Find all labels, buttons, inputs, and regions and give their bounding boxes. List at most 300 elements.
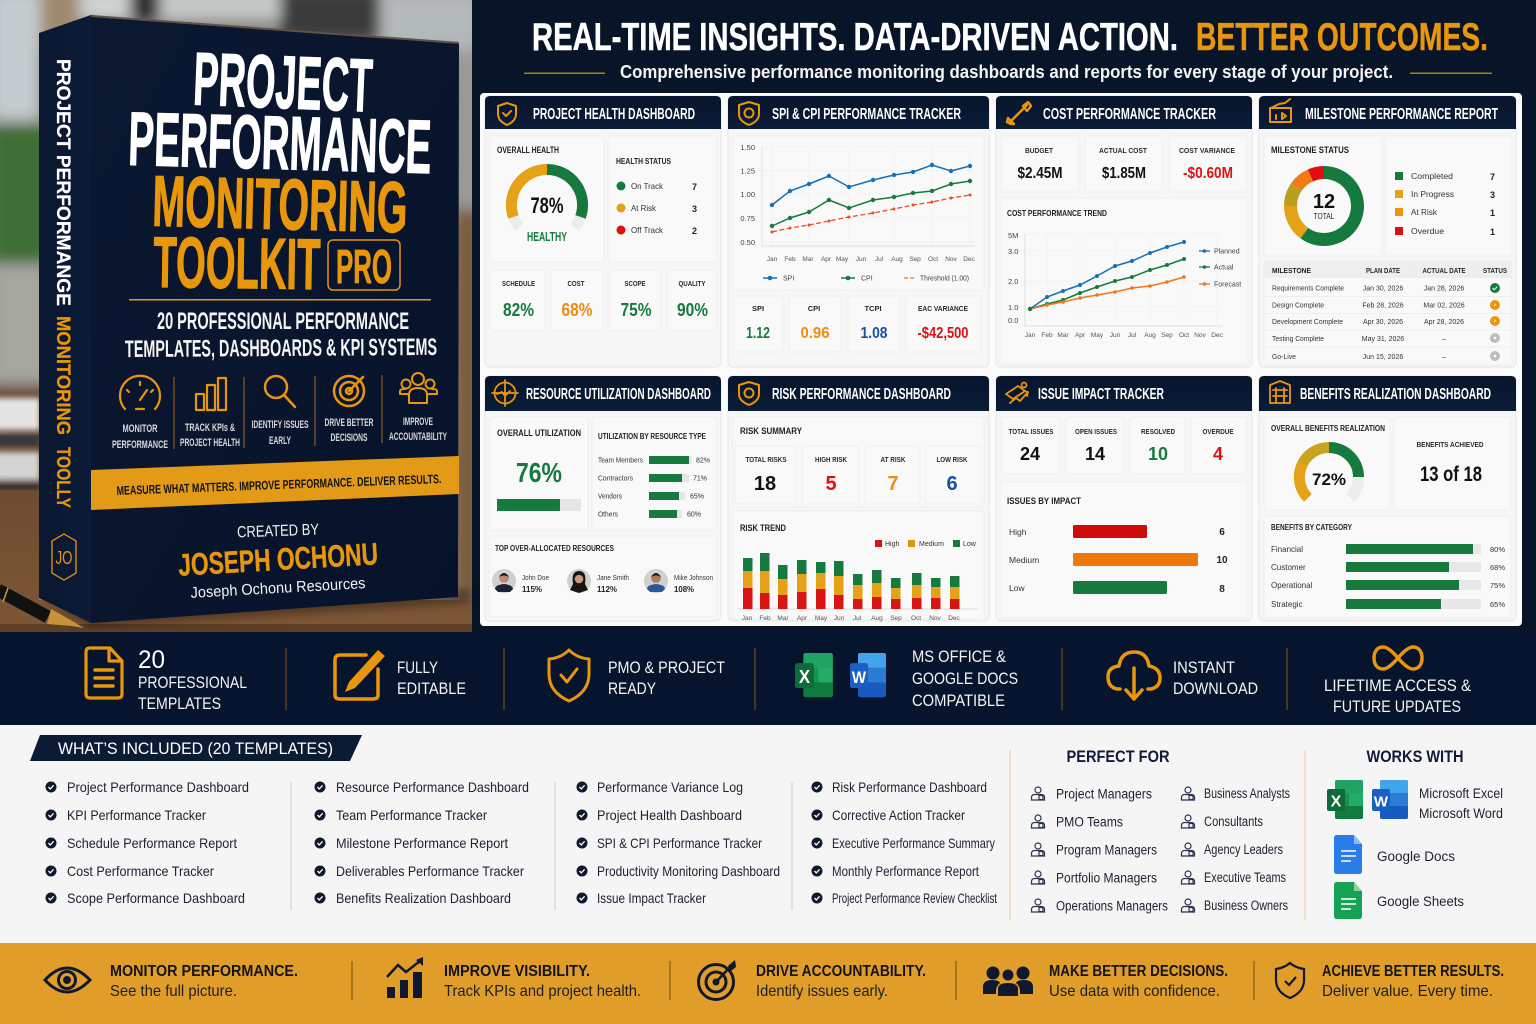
template list: column 1: Scope Performance Dashboard bbox=[67, 890, 245, 906]
cover benefit labels bbox=[112, 375, 447, 451]
cost line chart: Dec bbox=[1211, 332, 1224, 339]
impact bars: 6 bbox=[1219, 527, 1225, 538]
icon: Google Sheets bbox=[1334, 882, 1362, 919]
panel: project health dashboard: 2 bbox=[692, 226, 697, 236]
feature: instant download: INSTANT bbox=[1173, 658, 1235, 677]
cover benefit labels: EARLY bbox=[269, 435, 291, 447]
kpi cards: 68% bbox=[562, 300, 592, 320]
title: headline: REAL-TIME INSIGHTS. DATA-DRIVEN ACTION. bbox=[532, 16, 1178, 59]
line chart: Nov bbox=[945, 256, 958, 263]
panel: works with: WORKS WITH bbox=[1366, 747, 1464, 766]
donut chart: 12 total bbox=[1290, 172, 1357, 240]
kpi cards: EAC VARIANCE bbox=[918, 304, 968, 313]
impact bars: Low bbox=[1009, 583, 1025, 593]
milestone table: MILESTONE bbox=[1272, 266, 1311, 275]
cover benefit labels: TRACK KPIs & bbox=[185, 422, 235, 434]
issue kpi cards: 14 bbox=[1085, 444, 1105, 464]
line chart: Apr bbox=[821, 256, 832, 263]
icon: Excel and Word bbox=[1327, 780, 1408, 819]
milestone table: Requirements Complete bbox=[1272, 286, 1344, 292]
feature: 20 templates: PROFESSIONAL bbox=[138, 673, 247, 692]
line chart: Jan bbox=[767, 256, 778, 263]
kpi cards: -$0.60M bbox=[1183, 165, 1233, 182]
feature: PMO ready: PMO & PROJECT bbox=[608, 658, 725, 677]
icon: magnifier bbox=[265, 376, 295, 407]
book spine: MONITORING bbox=[52, 316, 73, 435]
icon: bar chart bbox=[196, 378, 226, 410]
gauge 72% bbox=[1299, 447, 1359, 498]
utilization bars: 65% bbox=[690, 494, 704, 500]
cover title: PRO bbox=[336, 241, 392, 294]
panel: benefits realization dashboard bbox=[1259, 376, 1516, 621]
milestone table: Jan 28, 2026 bbox=[1424, 286, 1464, 292]
heading bbox=[996, 96, 1252, 129]
heading: RISK PERFORMANCE DASHBOARD bbox=[772, 386, 951, 403]
cost line chart: Oct bbox=[1179, 332, 1189, 339]
cover title: MONITORING bbox=[151, 162, 408, 248]
kpi cards: SCOPE bbox=[624, 279, 646, 288]
issue kpi cards: 4 bbox=[1213, 444, 1223, 464]
feature: MS Office and Google Docs: COMPATIBLE bbox=[912, 691, 1005, 710]
kpi cards: BUDGET bbox=[1025, 146, 1053, 155]
panel: perfect for: Consultants bbox=[1204, 814, 1263, 829]
kpi cards bbox=[490, 270, 717, 331]
stacked bar chart: Aug bbox=[871, 615, 883, 622]
milestone table bbox=[1264, 261, 1512, 365]
panel: works with bbox=[1327, 747, 1503, 919]
kpi cards: CPI bbox=[808, 304, 820, 313]
panel: perfect for: Business Owners bbox=[1204, 898, 1288, 913]
kpi cards: 1.12 bbox=[746, 325, 770, 342]
outcome: achieve better results: Deliver value. Every time. bbox=[1322, 983, 1493, 1000]
panel: perfect for: Agency Leaders bbox=[1204, 842, 1283, 857]
kpi cards: 0.96 bbox=[800, 325, 830, 342]
category bars: 68% bbox=[1490, 563, 1505, 572]
heading bbox=[485, 376, 721, 411]
outcome: monitor performance bbox=[45, 963, 298, 1000]
cost line chart: Feb bbox=[1041, 332, 1053, 339]
utilization bars: Others bbox=[598, 512, 618, 518]
cost line chart: 1.0 bbox=[1008, 303, 1018, 312]
icon: speedometer bbox=[120, 376, 160, 409]
cost line chart: Aug bbox=[1144, 332, 1156, 339]
cover benefit labels: MONITOR bbox=[122, 423, 158, 435]
icon: team bbox=[400, 373, 437, 403]
kpi cards: -$42,500 bbox=[918, 325, 969, 342]
panel: milestone performance report: 1 bbox=[1490, 227, 1495, 237]
panel: perfect for: PERFECT FOR bbox=[1066, 747, 1170, 766]
template list: column 2: Benefits Realization Dashboard bbox=[336, 890, 511, 906]
book spine: TOOLLY bbox=[52, 447, 73, 508]
icon: target bbox=[334, 376, 364, 406]
feature: 20 templates: 20 bbox=[138, 646, 165, 674]
line chart: May bbox=[836, 256, 849, 263]
cost line chart: Forecast bbox=[1214, 282, 1241, 288]
line chart: Threshold (1.00) bbox=[920, 276, 969, 282]
panel: works with: Microsoft Word bbox=[1419, 806, 1503, 821]
utilization bars: 82% bbox=[696, 458, 710, 464]
template list: column 2 bbox=[314, 779, 529, 906]
line chart: 1.50 bbox=[740, 143, 755, 152]
book shadow bbox=[39, 590, 470, 626]
book front cover bbox=[91, 15, 459, 623]
category bars: Financial bbox=[1271, 545, 1303, 554]
panel: perfect for: Project Managers bbox=[1056, 786, 1152, 802]
heading: what's included bbox=[30, 735, 362, 761]
heading: what's included: WHAT’S INCLUDED (20 TEMPLATES) bbox=[58, 740, 333, 758]
stacked bar chart: Nov bbox=[929, 615, 942, 622]
white section background bbox=[0, 725, 1536, 943]
feature: lifetime access bbox=[1324, 647, 1472, 716]
milestone table: STATUS bbox=[1483, 266, 1507, 275]
template list: column 3 bbox=[576, 779, 780, 906]
milestone table: Feb 28, 2026 bbox=[1362, 302, 1404, 310]
panel: milestone performance report: Overdue bbox=[1411, 226, 1444, 236]
feature: editable: FULLY bbox=[397, 658, 438, 677]
template list: column 2: Deliverables Performance Tracker bbox=[336, 863, 524, 879]
subtitle: Comprehensive performance monitoring dashboards and reports for every stage of your project. bbox=[620, 62, 1393, 82]
stacked bar chart: Jan bbox=[742, 615, 753, 622]
feature: editable: EDITABLE bbox=[397, 679, 466, 698]
book: Project Performance Monitoring Toolkit bbox=[39, 15, 459, 623]
avatar: John Doe: John Doe bbox=[522, 575, 549, 582]
milestone table: Jan 30, 2026 bbox=[1363, 286, 1403, 292]
book spine: JO bbox=[56, 548, 72, 568]
risk kpi cards: HIGH RISK bbox=[815, 455, 847, 464]
cost line chart: Jun bbox=[1110, 332, 1121, 339]
category bars: 65% bbox=[1490, 600, 1505, 609]
line chart: Mar bbox=[802, 256, 814, 263]
panel: perfect for: Operations Managers bbox=[1056, 898, 1168, 914]
panel: benefits realization dashboard: 13 of 18 bbox=[1420, 463, 1482, 486]
issue kpi cards: 10 bbox=[1148, 444, 1168, 464]
cost line chart: Planned bbox=[1214, 248, 1240, 256]
stacked bar chart: Mar bbox=[777, 615, 789, 622]
kpi cards: COST VARIANCE bbox=[1179, 146, 1235, 155]
cover benefit labels: DRIVE BETTER bbox=[324, 417, 374, 429]
utilization bars: 71% bbox=[693, 476, 707, 482]
cover author: CREATED BY bbox=[237, 522, 320, 541]
utilization bars: Team Members bbox=[598, 458, 643, 464]
panel: SPI and CPI tracker bbox=[728, 96, 989, 367]
feature: editable bbox=[335, 650, 466, 699]
risk kpi cards: 18 bbox=[754, 473, 776, 495]
cost line chart: Sep bbox=[1161, 332, 1173, 339]
cost line chart: Actual bbox=[1214, 264, 1234, 272]
stacked bar chart: Medium bbox=[919, 541, 944, 548]
line chart: Feb bbox=[784, 256, 796, 263]
panel: resource utilization dashboard: TOP OVER-ALLOCATED RESOURCES bbox=[495, 544, 615, 553]
issue kpi cards: 24 bbox=[1020, 444, 1040, 464]
panel: project health dashboard: OVERALL HEALTH bbox=[497, 145, 559, 155]
heading bbox=[1259, 96, 1516, 129]
panel: project health dashboard: On Track bbox=[631, 181, 664, 191]
line chart: CPI bbox=[861, 276, 873, 282]
avatar: Jane Smith: Jane Smith bbox=[597, 575, 629, 582]
heading bbox=[1259, 376, 1516, 411]
kpi cards: 75% bbox=[620, 300, 652, 320]
cover subtitle bbox=[125, 308, 437, 363]
heading bbox=[728, 96, 989, 129]
panel: milestone performance report: In Progress bbox=[1411, 189, 1454, 199]
outcome: drive accountability: DRIVE ACCOUNTABILITY. bbox=[756, 963, 926, 980]
panel: milestone performance report: At Risk bbox=[1411, 207, 1438, 217]
heading bbox=[996, 376, 1252, 411]
panel: issue impact tracker: ISSUES BY IMPACT bbox=[1007, 496, 1081, 506]
panel: benefits realization dashboard: BENEFITS ACHIEVED bbox=[1416, 440, 1484, 449]
panel: milestone performance report: 1 bbox=[1490, 208, 1495, 218]
template list: column 3: Productivity Monitoring Dashboard bbox=[597, 863, 780, 879]
cover benefit labels: PROJECT HEALTH bbox=[180, 437, 240, 449]
pen bbox=[0, 588, 84, 628]
cover benefit icons bbox=[120, 373, 437, 410]
kpi cards: $2.45M bbox=[1018, 165, 1062, 182]
panel: perfect for: Program Managers bbox=[1056, 842, 1157, 858]
category bars: 80% bbox=[1490, 545, 1505, 554]
heading: RESOURCE UTILIZATION DASHBOARD bbox=[526, 386, 711, 403]
heading: SPI & CPI PERFORMANCE TRACKER bbox=[772, 106, 961, 123]
category bars: Strategic bbox=[1271, 600, 1303, 609]
cover benefit labels: IDENTIFY ISSUES bbox=[252, 419, 308, 431]
panel: milestone performance report: TOTAL bbox=[1314, 212, 1335, 221]
panel: works with: Google Sheets bbox=[1377, 894, 1464, 909]
cover title: PROJECT bbox=[192, 36, 374, 128]
feature band bbox=[0, 632, 1536, 725]
panel: cost performance tracker bbox=[996, 96, 1252, 367]
panel: perfect for: Portfolio Managers bbox=[1056, 870, 1157, 886]
cover benefit labels: ACCOUNTABILITY bbox=[389, 431, 447, 443]
stacked bar chart: May bbox=[815, 615, 828, 622]
template list: column 1: Schedule Performance Report bbox=[67, 835, 237, 851]
panel: milestone performance report: 3 bbox=[1490, 190, 1495, 200]
feature: MS Office and Google Docs: MS OFFICE & bbox=[912, 647, 1007, 666]
outcome: make better decisions: Use data with confidence. bbox=[1049, 983, 1220, 1000]
cost line chart: May bbox=[1091, 332, 1104, 339]
panel: milestone performance report bbox=[1259, 96, 1516, 367]
kpi cards: TCPI bbox=[864, 304, 882, 313]
feature: instant download: DOWNLOAD bbox=[1173, 679, 1258, 698]
panel: resource utilization dashboard bbox=[485, 376, 721, 621]
stacked bar chart bbox=[738, 540, 978, 622]
impact bars: Medium bbox=[1009, 555, 1039, 565]
outcome: drive accountability: Identify issues early. bbox=[756, 983, 888, 1000]
cost line chart: Mar bbox=[1057, 332, 1069, 339]
cost line chart: 5M bbox=[1008, 231, 1018, 240]
feature: 20 templates bbox=[86, 646, 247, 713]
risk kpi cards: 5 bbox=[825, 473, 837, 495]
outcome: improve visibility bbox=[387, 957, 641, 1000]
panel: milestone performance report: 7 bbox=[1490, 172, 1495, 182]
line chart: Jul bbox=[875, 256, 884, 263]
feature: instant download bbox=[1108, 652, 1258, 699]
line chart: SPI bbox=[783, 276, 794, 282]
panel: project health dashboard: Off Track bbox=[631, 225, 664, 235]
cover benefit labels: PERFORMANCE bbox=[112, 439, 168, 451]
feature: MS Office and Google Docs bbox=[795, 647, 1018, 710]
outcome: monitor performance: MONITOR PERFORMANCE. bbox=[110, 963, 298, 980]
outcomes band bbox=[0, 943, 1536, 1024]
panel: milestone performance report: Completed bbox=[1411, 171, 1453, 181]
cover benefit labels: IMPROVE bbox=[403, 416, 433, 428]
cost line chart: 0.0 bbox=[1008, 316, 1018, 325]
outcome: make better decisions bbox=[983, 963, 1228, 1000]
panel: perfect for: Executive Teams bbox=[1204, 870, 1286, 885]
milestone table: Development Complete bbox=[1272, 319, 1343, 326]
cover title: TOOLKIT bbox=[153, 223, 321, 305]
panel: project health dashboard: 78% bbox=[530, 193, 564, 218]
outcome: improve visibility: IMPROVE VISIBILITY. bbox=[444, 963, 590, 980]
stacked bar chart: Sep bbox=[890, 615, 902, 622]
kpi cards: QUALITY bbox=[678, 279, 706, 288]
line chart: 0.75 bbox=[740, 214, 755, 223]
kpi cards: 82% bbox=[503, 300, 534, 320]
impact bars bbox=[1009, 525, 1228, 595]
line chart: Oct bbox=[928, 256, 938, 263]
template list: column 2: Resource Performance Dashboard bbox=[336, 779, 529, 795]
heading bbox=[485, 96, 721, 129]
kpi cards bbox=[734, 296, 981, 352]
milestone table: Design Complete bbox=[1272, 302, 1324, 310]
template list: column 1: KPI Performance Tracker bbox=[67, 807, 206, 823]
impact bars: 10 bbox=[1216, 555, 1228, 566]
book spine bbox=[39, 15, 94, 623]
risk kpi cards: LOW RISK bbox=[936, 455, 968, 464]
template list: column 2: Milestone Performance Report bbox=[336, 835, 508, 851]
template list: column 1 bbox=[46, 779, 249, 906]
panel: perfect for: Business Analysts bbox=[1204, 786, 1290, 801]
stacked bar chart: Feb bbox=[759, 615, 771, 622]
kpi cards: $1.85M bbox=[1102, 165, 1146, 182]
template list: column 4: Project Performance Review Checklist bbox=[832, 890, 997, 906]
heading: PROJECT HEALTH DASHBOARD bbox=[533, 106, 695, 123]
line chart: 1.00 bbox=[740, 190, 755, 199]
template list: column 1: Project Performance Dashboard bbox=[67, 779, 249, 795]
line chart bbox=[740, 143, 976, 282]
icon: Google Docs bbox=[1334, 835, 1362, 874]
milestone table: Jun 15, 2026 bbox=[1363, 354, 1403, 361]
avatar: Jane Smith: 112% bbox=[597, 584, 617, 594]
stacked bar chart: Dec bbox=[948, 615, 961, 622]
feature: PMO ready: READY bbox=[608, 679, 656, 698]
cover title bbox=[127, 36, 433, 305]
utilization bars: Vendors bbox=[598, 494, 622, 500]
cost line chart: 2.0 bbox=[1008, 277, 1018, 286]
issue kpi cards: OVERDUE bbox=[1202, 427, 1234, 436]
panel: project health dashboard: HEALTHY bbox=[527, 230, 567, 244]
cost line chart bbox=[1008, 231, 1241, 339]
panel: project health dashboard: HEALTH STATUS bbox=[616, 156, 671, 166]
milestone table: Apr 28, 2026 bbox=[1424, 319, 1464, 326]
panel: project health dashboard: 3 bbox=[692, 204, 697, 214]
stacked bar chart: Jun bbox=[834, 615, 845, 622]
heading: COST PERFORMANCE TRACKER bbox=[1043, 106, 1216, 123]
photo background: office desk bbox=[0, 0, 480, 642]
panel: milestone performance report: 12 bbox=[1313, 191, 1335, 213]
cover author: Joseph Ochonu Resources bbox=[190, 575, 366, 602]
cost line chart: Nov bbox=[1194, 332, 1207, 339]
line chart: Sep bbox=[909, 256, 921, 263]
stacked bar chart: Oct bbox=[911, 615, 921, 622]
panel: milestone performance report: MILESTONE STATUS bbox=[1271, 145, 1349, 155]
kpi cards: 1.08 bbox=[860, 325, 888, 342]
cost line chart: Jul bbox=[1128, 332, 1137, 339]
milestone table: Mar 02, 2026 bbox=[1423, 302, 1465, 310]
cover benefit labels: DECISIONS bbox=[330, 432, 368, 444]
issue kpi cards: RESOLVED bbox=[1141, 427, 1175, 436]
template list: column 3: Project Health Dashboard bbox=[597, 807, 742, 823]
line chart: Aug bbox=[891, 256, 903, 263]
risk kpi cards: 6 bbox=[946, 473, 958, 495]
feature: 20 templates: TEMPLATES bbox=[138, 694, 221, 713]
cover author: JOSEPH OCHONU bbox=[177, 536, 379, 583]
issue kpi cards bbox=[1001, 417, 1247, 474]
milestone table: PLAN DATE bbox=[1366, 266, 1400, 275]
template list: column 3: SPI & CPI Performance Tracker bbox=[597, 835, 762, 851]
panel: resource utilization dashboard: UTILIZATION BY RESOURCE TYPE bbox=[598, 432, 707, 441]
stacked bar chart: Low bbox=[963, 541, 977, 548]
panel: risk performance dashboard: RISK SUMMARY bbox=[740, 426, 802, 436]
avatar: Jane Smith bbox=[567, 569, 629, 594]
panel: benefits realization dashboard: BENEFITS BY CATEGORY bbox=[1271, 523, 1353, 532]
panel: issue impact tracker bbox=[996, 376, 1252, 621]
template list: column 4: Risk Performance Dashboard bbox=[832, 779, 987, 795]
panel: works with: Google Docs bbox=[1377, 849, 1455, 864]
panel: project health dashboard bbox=[485, 96, 721, 367]
template list: column 1: Cost Performance Tracker bbox=[67, 863, 214, 879]
avatar: Mike Johnson: 108% bbox=[674, 584, 694, 594]
kpi cards: SCHEDULE bbox=[502, 279, 535, 288]
template list: column 3: Performance Variance Log bbox=[597, 779, 743, 795]
cover subtitle: TEMPLATES, DASHBOARDS & KPI SYSTEMS bbox=[125, 334, 437, 363]
line chart: Jun bbox=[856, 256, 867, 263]
milestone table: – bbox=[1442, 354, 1446, 361]
panel: project health dashboard: At Risk bbox=[631, 203, 657, 213]
stacked bar chart: Apr bbox=[797, 615, 808, 622]
panel: risk performance dashboard bbox=[728, 376, 989, 622]
utilization bars bbox=[598, 456, 710, 518]
outcome: improve visibility: Track KPIs and project health. bbox=[444, 983, 641, 1000]
impact bars: High bbox=[1009, 527, 1027, 537]
panel: perfect for: PMO Teams bbox=[1056, 814, 1123, 830]
panel: project health dashboard: 7 bbox=[692, 182, 697, 192]
risk kpi cards: AT RISK bbox=[880, 455, 906, 464]
cost line chart: 3.0 bbox=[1008, 247, 1018, 256]
risk kpi cards: 7 bbox=[887, 473, 899, 495]
panel: benefits realization dashboard: OVERALL BENEFITS REALIZATION bbox=[1271, 424, 1385, 433]
category bars: Operational bbox=[1271, 581, 1313, 590]
avatar: Mike Johnson: Mike Johnson bbox=[674, 575, 713, 582]
category bars: Customer bbox=[1271, 563, 1306, 572]
outcome: make better decisions: MAKE BETTER DECISIONS. bbox=[1049, 963, 1228, 980]
dashboards container bbox=[480, 93, 1522, 626]
category bars: 75% bbox=[1490, 581, 1505, 590]
template list: column 4: Executive Performance Summary bbox=[832, 835, 995, 851]
cover title: PERFORMANCE bbox=[127, 97, 433, 190]
line chart: 0.50 bbox=[740, 238, 755, 247]
template list: column 4: Monthly Performance Report bbox=[832, 863, 979, 879]
milestone table: May 31, 2026 bbox=[1362, 336, 1404, 343]
cover subtitle: 20 PROFESSIONAL PERFORMANCE bbox=[157, 308, 409, 335]
impact bars: 8 bbox=[1219, 584, 1225, 595]
issue kpi cards: TOTAL ISSUES bbox=[1008, 427, 1054, 436]
milestone table: ACTUAL DATE bbox=[1422, 266, 1466, 275]
utilization bars: Contractors bbox=[598, 476, 633, 482]
panel: risk performance dashboard: RISK TREND bbox=[740, 523, 786, 533]
template list: column 3: Issue Impact Tracker bbox=[597, 890, 706, 906]
utilization bars: 60% bbox=[687, 512, 701, 518]
cover banner bbox=[91, 456, 459, 510]
issue kpi cards: OPEN ISSUES bbox=[1075, 427, 1117, 436]
